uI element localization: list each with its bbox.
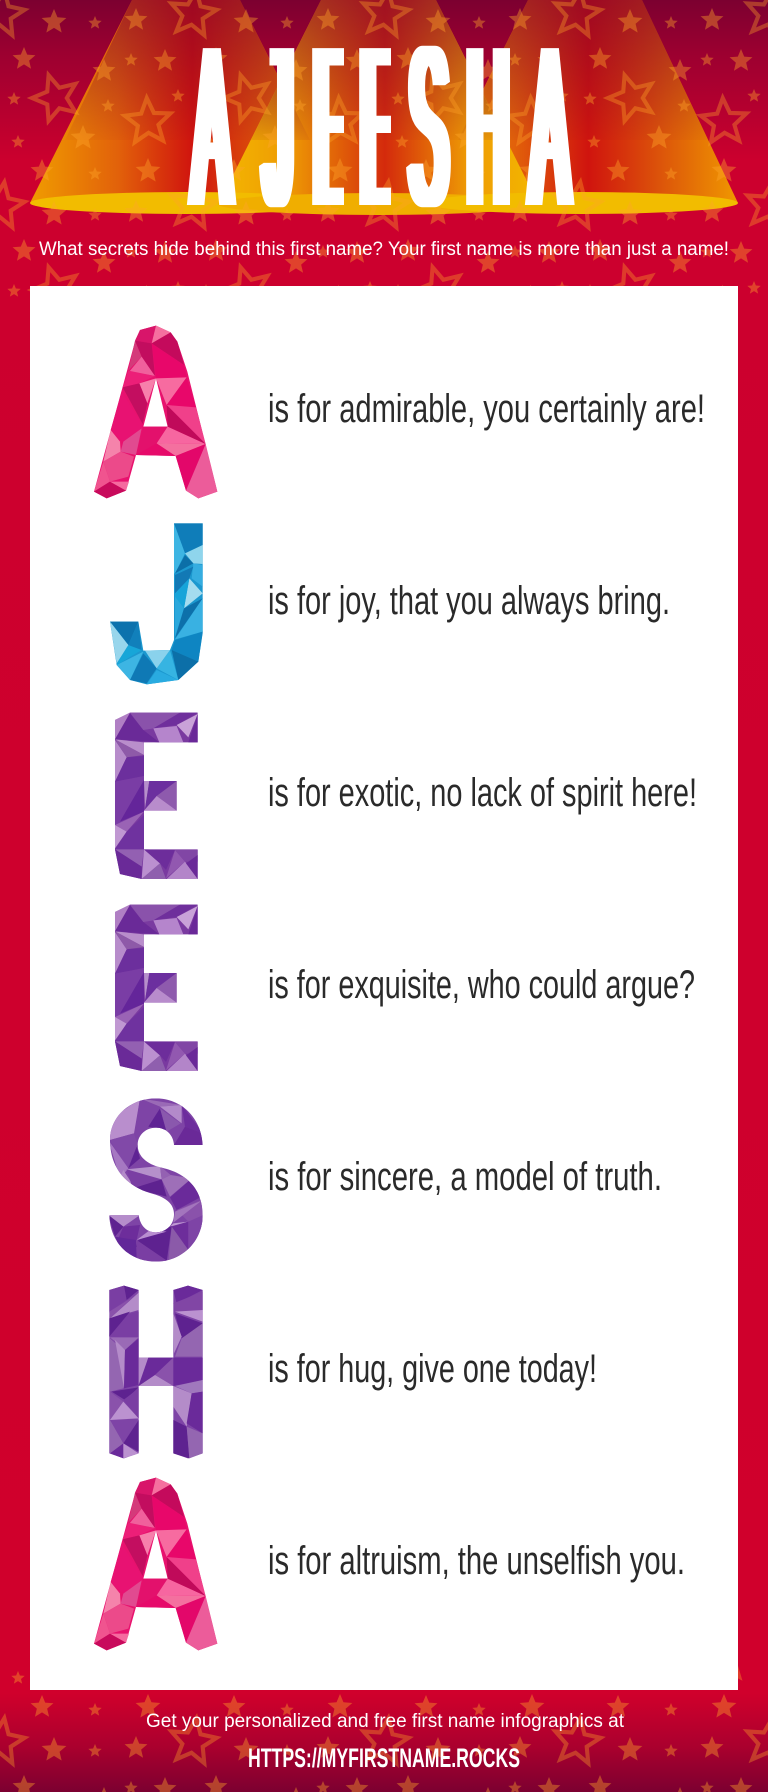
white panel [30,286,738,1690]
footer text: Get your personalized and free first name infographics at [146,1711,625,1732]
letter E (first) [115,713,198,879]
spotlight cones [30,0,738,215]
letter E (second) [115,905,198,1071]
footer url: HTTPS://MYFIRSTNAME.ROCKS [248,1743,520,1773]
line 6: is for hug, give one today! [268,1347,597,1391]
letter A (second) [94,1478,217,1650]
letter H [109,1286,203,1458]
star pattern: footer [0,1665,768,1792]
letter S [107,1097,205,1263]
subtitle: What secrets hide behind this first name? Your first name is more than just a name! [39,239,729,260]
letter A (first) [94,326,217,498]
star pattern: header [0,0,768,300]
title: AJEESHA [193,1,569,254]
letter J [110,523,203,684]
